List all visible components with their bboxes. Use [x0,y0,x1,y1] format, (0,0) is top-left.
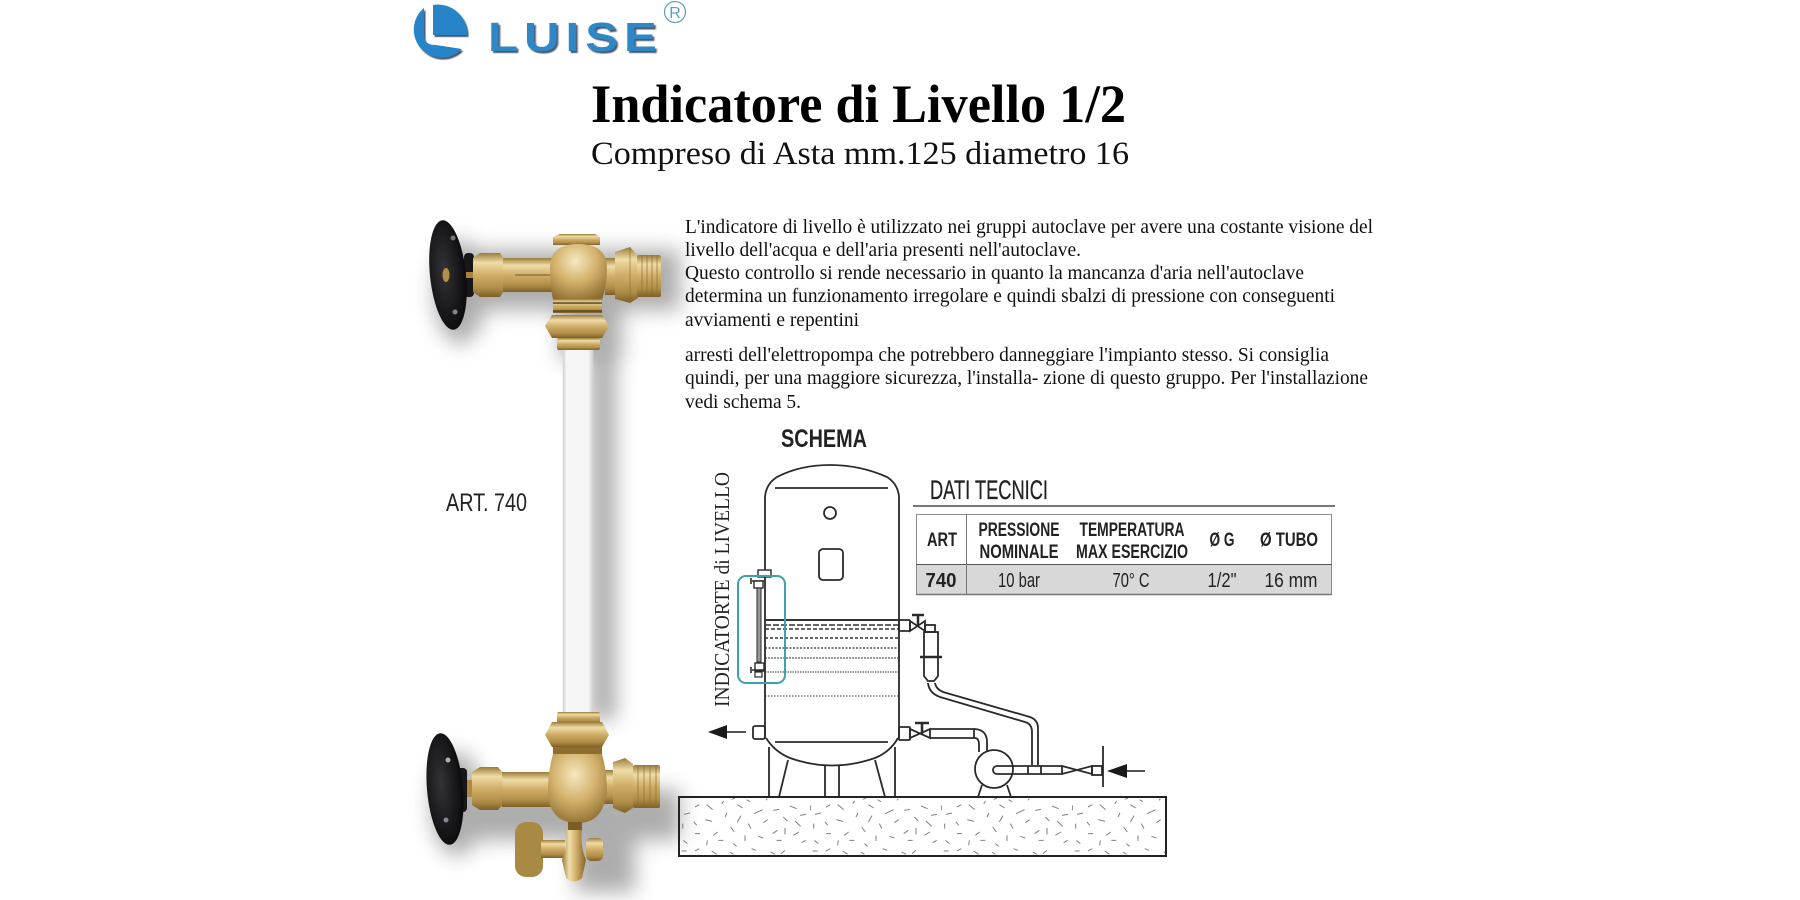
description paragraph: arresti dell'elettropompa che potrebbero danneggiare l'impianto stesso. Si consiglia [685,345,1329,366]
table row: 70° C [1112,570,1150,592]
diagram: autoclave system [679,465,1166,856]
rotated label: INDICATORTE di LIVELLO: INDICATORTE di LIVELLO [710,472,734,707]
label: ART. 740: ART. 740 [446,489,527,517]
upper valve and air vessel [899,615,1038,765]
subtitle: Compreso di Asta mm.125 diametro 16 [591,136,1129,172]
concrete floor [679,797,1166,856]
drain cock [515,822,603,882]
table header [927,520,1318,563]
description paragraph: vedi schema 5. [685,392,801,413]
arrow: inlet right [1107,764,1145,778]
valve shadow [431,240,680,892]
logo: LUISE [414,2,686,60]
arrow: outlet left [708,725,746,739]
table row: 740 [926,570,956,592]
description paragraph: livello dell'acqua e dell'aria presenti nell'autoclave. [685,240,1081,261]
description paragraph: L'indicatore di livello è utilizzato nei gruppi autoclave per avere una costante visione del [685,217,1374,238]
top valve [424,218,661,350]
lower valve and delivery pipe [899,723,987,752]
description paragraph: determina un funzionamento irregolare e quindi sbalzi di pressione con conseguenti [685,286,1336,307]
heading: SCHEMA: SCHEMA [781,425,867,453]
table: technical data [916,514,1332,595]
table header: NOMINALE [980,542,1058,563]
heading: DATI TECNICI: DATI TECNICI [930,475,1048,505]
product photo: level indicator valve assembly [422,218,680,892]
table header: MAX ESERCIZIO [1076,542,1188,563]
bottom valve [422,712,660,882]
pump [975,746,1103,797]
description paragraph: Questo controllo si rende necessario in quanto la mancanza d'aria nell'autoclave [685,263,1304,284]
table header: TEMPERATURA [1080,520,1185,541]
table row: 10 bar [998,570,1040,592]
table header: Ø G [1210,530,1234,551]
title: Indicatore di Livello 1/2 [591,74,1126,134]
heading rule [913,505,1335,507]
gauge highlight box [738,576,785,683]
sight tube [563,348,593,714]
table row [926,570,1318,592]
description paragraph: quindi, per una maggiore sicurezza, l'installa- zione di questo gruppo. Per l'installazione [685,368,1368,389]
water level lines [765,620,899,696]
logo wordmark: LUISE [488,14,663,60]
table header: Ø TUBO [1260,530,1318,551]
registered mark: R [669,5,681,22]
table header: ART [927,530,957,551]
logo mark [414,5,467,58]
description paragraph: avviamenti e repentini [685,310,860,331]
description paragraph [685,217,1374,413]
tank [753,465,899,797]
table row: 1/2" [1208,570,1236,592]
table header: PRESSIONE [978,520,1060,541]
level gauge [751,570,771,677]
registered mark [664,2,686,22]
table row: 16 mm [1264,570,1318,592]
table frame [916,514,1332,595]
